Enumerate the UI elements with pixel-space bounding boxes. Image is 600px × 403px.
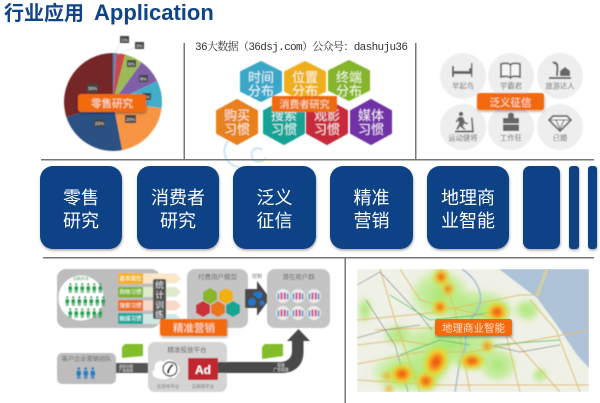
card: precision marketing — [330, 166, 413, 249]
watermark caption: 36大数据（36dsj.com）公众号：dashuju36 — [195, 39, 408, 54]
card: precision marketing: 精准 — [354, 188, 390, 208]
panel: paying user model — [187, 269, 248, 328]
panel: training samples: 训练样本 — [73, 275, 89, 281]
panel: geographic heat map — [357, 267, 589, 394]
pale feature arrows — [143, 274, 181, 324]
card: retail research: 零售 — [63, 188, 99, 208]
feature tags: 搜索习惯 — [119, 302, 142, 310]
big curved arrow: 投放 — [277, 362, 285, 368]
hexagon: search habits — [264, 100, 304, 144]
pie percentage labels: 20% — [126, 117, 135, 122]
secondary roads — [357, 269, 560, 392]
card: general credit: 征信 — [256, 211, 292, 231]
circle: top student — [488, 53, 534, 99]
circle: travel expert: 旅游达人 — [545, 82, 575, 90]
statistical training block — [153, 279, 166, 320]
pie percentage labels: 23% — [95, 121, 104, 126]
roads — [357, 269, 589, 392]
feature tags: 购物习惯 — [119, 288, 142, 296]
connector bar: 选择对接 — [119, 364, 133, 368]
pie percentage labels: 8% — [140, 76, 147, 82]
label: general credit — [477, 93, 544, 110]
card: geographic business intelligence: 地理商 — [441, 188, 495, 208]
panel: precision marketing diagram — [57, 269, 330, 392]
divider right — [415, 43, 416, 160]
panel: precision delivery platform: 精准投放平台 — [168, 345, 206, 354]
heat: green areas — [357, 268, 548, 394]
card: consumer research: 消费者 — [151, 188, 205, 208]
panel: precision delivery platform: 应答呼平台 — [157, 383, 180, 390]
circle: married — [537, 104, 583, 150]
pie percentage labels — [87, 36, 151, 127]
card: geographic business intelligence: 业智能 — [441, 211, 495, 231]
circle: travel expert — [537, 53, 583, 99]
circle: fitness fan: 运动健将 — [448, 134, 478, 142]
label: geographic business intelligence: 地理商业智能 — [442, 322, 505, 334]
label: geographic business intelligence — [435, 319, 512, 336]
card: precision marketing: 营销 — [354, 211, 390, 231]
hexagon: viewing habits: 习惯 — [314, 122, 340, 137]
hexagon: purchase habits: 购买 — [224, 108, 250, 123]
card: consumer research — [137, 166, 219, 249]
panel: client marketing team: 客户企业营销团队 — [62, 355, 112, 363]
panel: precision delivery platform: 互联网平台 — [192, 383, 215, 390]
pie chart — [64, 53, 162, 151]
pie percentage labels: 3% — [136, 44, 143, 48]
label: precision marketing: 精准营销 — [173, 322, 215, 334]
panel: paying user model: 付费用户模型 — [198, 272, 238, 281]
statistical training block: 训 — [155, 300, 164, 310]
circle: married: 已婚 — [553, 134, 568, 142]
panel: precision delivery platform — [148, 342, 227, 392]
panel: consumer research hexagons — [217, 61, 391, 168]
circle: early bird: 早起鸟 — [452, 82, 474, 90]
hexagon: search habits: 习惯 — [271, 122, 297, 137]
hexagon: media habits — [351, 100, 391, 144]
label: consumer research — [272, 96, 337, 112]
card: consumer research: 研究 — [160, 211, 196, 231]
card: blank sliver two — [588, 166, 597, 249]
card: blank sliver one — [569, 166, 579, 249]
card: blank partial — [523, 166, 560, 249]
hexagon: location distribution: 位置 — [292, 70, 318, 85]
circle: workaholic: 工作狂 — [500, 134, 522, 142]
panel: retail research pie chart — [64, 36, 162, 151]
card: retail research: 研究 — [63, 211, 99, 231]
card: geographic business intelligence — [427, 166, 509, 249]
hexagon: viewing habits — [307, 100, 347, 144]
card: general credit — [233, 166, 316, 249]
label: precision marketing — [160, 319, 227, 336]
hexagon: purchase habits — [217, 100, 257, 144]
upper divider — [41, 159, 594, 160]
hexagon: location distribution — [285, 62, 325, 101]
hexagon: time distribution: 分布 — [248, 84, 274, 98]
panel: general credit circles — [440, 53, 583, 150]
green person icons — [65, 283, 105, 318]
statistical training block: 计 — [155, 290, 164, 300]
hexagon: time distribution — [241, 62, 281, 101]
connector bar — [116, 363, 148, 373]
label: retail research: 零售研究 — [91, 97, 133, 110]
watermark logo — [224, 136, 266, 168]
pie percentage labels: 1% — [121, 38, 128, 42]
hexagon: location distribution: 分布 — [292, 84, 318, 98]
divider left — [184, 43, 185, 160]
lower vertical divider — [344, 257, 346, 403]
circle: early bird — [440, 53, 486, 99]
circle: top student: 学霸君 — [500, 82, 522, 90]
card: general credit: 泛义 — [256, 188, 292, 208]
hexagon: search habits: 搜索 — [271, 108, 297, 123]
green tag left — [122, 344, 143, 358]
big curved arrow — [218, 329, 310, 373]
hexagon: device distribution: 终端 — [336, 70, 362, 85]
panel: potential users — [267, 269, 330, 328]
hexagon: device distribution: 分布 — [336, 84, 362, 98]
icon: Ad box: Ad — [195, 363, 211, 377]
hexagon: media habits: 习惯 — [358, 122, 384, 137]
feature tags: 触媒习惯 — [119, 314, 142, 322]
pie percentage labels: 6% — [128, 62, 135, 66]
control arrow — [245, 273, 270, 316]
pie percentage labels: 9% — [143, 94, 150, 100]
green tag right — [262, 344, 283, 359]
big curved arrow: 广告投放 — [273, 367, 289, 372]
feature tags — [118, 273, 143, 324]
feature tags: 基本属性 — [119, 274, 142, 282]
panel: training samples — [57, 269, 160, 328]
icon: phone cloud — [153, 360, 179, 379]
panel: client marketing team — [57, 353, 116, 384]
connector bar: 广告投放 — [119, 368, 133, 372]
circle: workaholic — [488, 104, 534, 150]
statistical training block: 练 — [155, 310, 164, 320]
category cards row — [40, 166, 597, 249]
hexagon: device distribution — [329, 61, 369, 100]
title: 行业应用 — [4, 1, 84, 25]
lower divider — [43, 257, 594, 258]
water — [499, 269, 589, 368]
map base — [357, 267, 589, 394]
statistical training block: 统 — [155, 280, 164, 290]
control arrow: 控制 — [252, 273, 262, 280]
hexagon: viewing habits: 观影 — [314, 108, 340, 123]
title: Application — [94, 0, 214, 25]
circle: fitness fan — [440, 104, 486, 150]
hexagon: time distribution: 时间 — [248, 70, 274, 85]
heat: hot spots — [381, 267, 510, 394]
pie percentage labels: 30% — [88, 86, 97, 91]
label: consumer research: 消费者研究 — [280, 98, 330, 111]
panel: potential users: 潜在用户群 — [282, 272, 315, 281]
label: general credit: 泛义征信 — [490, 97, 532, 109]
hexagon: purchase habits: 习惯 — [224, 122, 250, 137]
green arterial roads — [390, 295, 560, 355]
card: retail research — [40, 166, 122, 249]
hexagon: media habits: 媒体 — [358, 108, 384, 123]
